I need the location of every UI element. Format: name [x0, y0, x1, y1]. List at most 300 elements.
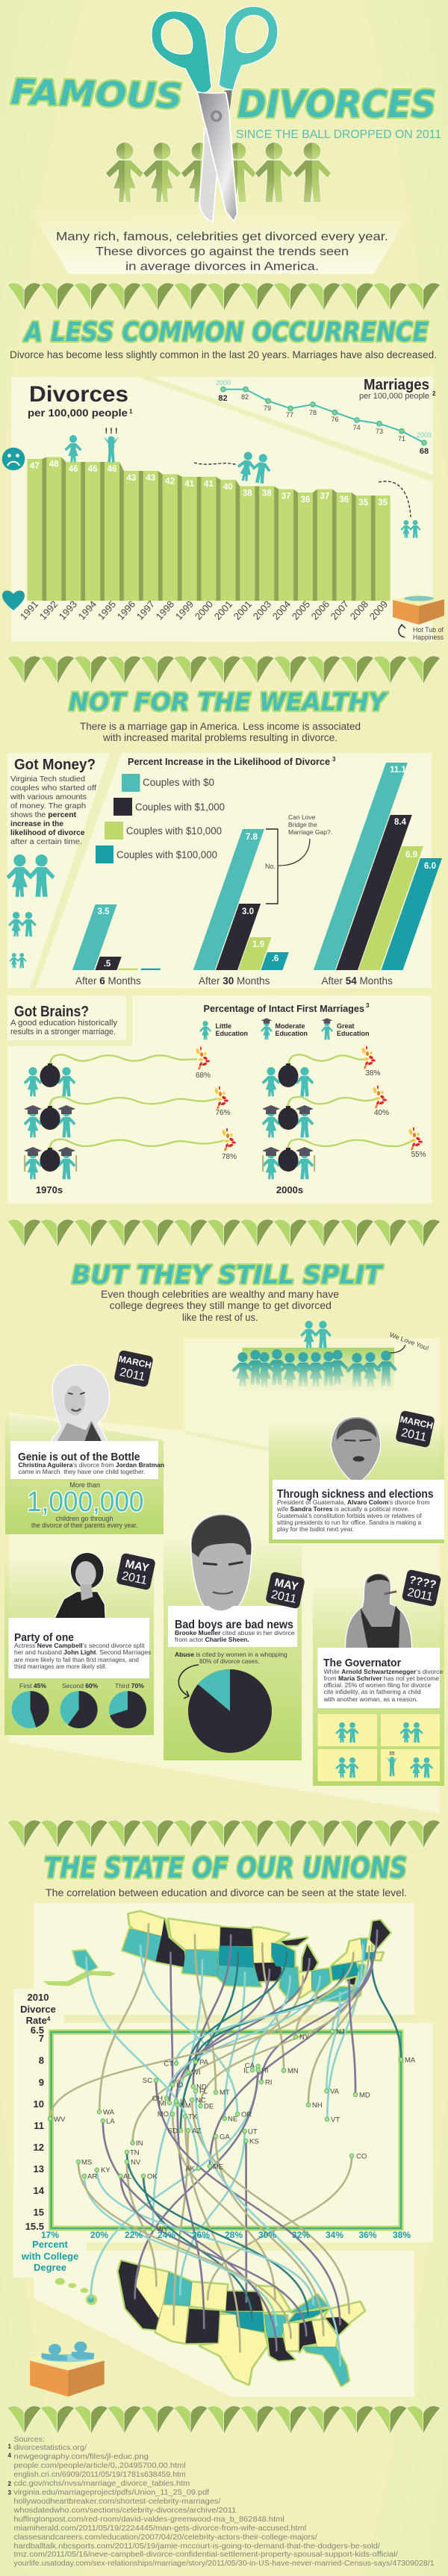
state data points and labels: WV: [54, 2116, 66, 2124]
panel: bad boys are bad news: 80% of divorce cases.: [199, 1657, 260, 1665]
map: southern states: [55, 2261, 364, 2386]
chart heading: intact first marriages: Percentage of Intact First Marriages: [203, 1003, 364, 1014]
crowd: We Love You!: [388, 1331, 430, 1352]
section intro: Divorce has become less slightly common in the last 20 years. Marriages have also decreased.: [10, 349, 437, 360]
slope lines: state connections: [50, 1924, 401, 2366]
legend: [96, 774, 225, 863]
badge: ???? 2011: 2011: [406, 1586, 434, 1604]
x axis: percent with college degree: 30%: [258, 2230, 276, 2240]
bar chart: after 30 months: After 30 Months: [199, 975, 270, 987]
state data points and labels: MI: [158, 2100, 167, 2107]
state data points and labels: NJ: [336, 2028, 345, 2036]
y axis: divorce rate: 6.5: [31, 2025, 44, 2036]
panel: got brains: [7, 995, 432, 1204]
callout: can love bridge the marriage gap: Bridge the: [288, 821, 317, 828]
heart banner 4: [7, 1820, 440, 1848]
section intro: with increased marital problems resulting in divorce.: [102, 731, 337, 743]
state data points and labels: GA: [220, 2133, 230, 2142]
bar chart: after 6 months: .5: [104, 960, 111, 969]
panel: bad boys are bad news: Brooke Mueller cited abuse in her divorce: [175, 1629, 295, 1636]
state data points and labels: LA: [106, 2118, 115, 2125]
fuse chart: 2000s: 55%: [411, 1151, 426, 1159]
bar chart: divorces per year: 46: [69, 465, 78, 474]
panel: bad boys are bad news: [164, 1514, 302, 1760]
bar chart: after 54 months: After 54 Months: [321, 975, 393, 987]
state data points and labels: KS: [249, 2137, 259, 2146]
bar chart: divorces per year: 1998: [154, 598, 176, 622]
bar chart: divorces per year: 36: [301, 495, 310, 504]
icon: scissors: [152, 7, 277, 222]
state data points and labels: VA: [330, 2088, 340, 2095]
fuse chart: 2000s: 38%: [365, 1069, 381, 1078]
caption: hot tub of happiness: Happiness: [413, 634, 444, 642]
bar chart: divorces per year: 38: [262, 490, 272, 498]
state data points and labels: DE: [204, 2103, 214, 2110]
y axis: divorce rate: 2010: [28, 1992, 49, 2003]
state data points and labels: CT: [164, 2060, 173, 2069]
state data points and labels: NC: [196, 2097, 206, 2104]
panel: party of one: [4, 1553, 154, 1735]
legend: education: Moderate: [275, 1022, 305, 1030]
bar chart: divorces per year: 2009: [367, 598, 390, 622]
section intro: There is a marriage gap in America. Less income is associated: [80, 720, 361, 732]
bar chart: divorces per year: 2007: [329, 598, 351, 622]
state data points and labels: WI: [192, 2069, 201, 2077]
badge: may 2011: [116, 1553, 156, 1590]
panel: the governator: from Maria Schriver has not yet become: [324, 1675, 439, 1682]
panel: genie is out of the bottle: Genie is out of the Bottle: [18, 1451, 140, 1463]
x axis: percent with college degree: 24%: [158, 2230, 175, 2240]
heading: but they still split: BUT THEY STILL SPLIT: [72, 1260, 384, 1290]
x axis: percent with college degree: 36%: [358, 2230, 377, 2240]
callout: can love bridge the marriage gap: Can Love: [288, 813, 316, 821]
bar chart: divorces per year: 35: [358, 498, 369, 507]
fuse chart: 2000s: [262, 1046, 426, 1195]
state data points and labels: TN: [130, 2149, 140, 2157]
badge: may 2011: MAY: [273, 1576, 299, 1593]
sources: tmz.com/2011/05/16/neve-campbell-divorce-confidential-settlement-property-spousal-support-kids-official/: [13, 2550, 398, 2559]
state data points and labels: UT: [248, 2128, 258, 2136]
bar chart: divorces per year: 42: [165, 478, 175, 487]
icon: walking couple: [194, 451, 273, 484]
bar chart: after 54 months: 11.1: [390, 766, 406, 775]
state data points and labels: CA: [245, 2062, 255, 2070]
heading: divorces: Divorces: [29, 382, 128, 407]
line chart: marriages: 71: [398, 435, 405, 443]
sources: 2: [7, 2480, 12, 2487]
state data points and labels: WY: [157, 2225, 169, 2233]
fuse chart: 1970s: 78%: [222, 1153, 237, 1161]
intro text: in average divorces in America.: [125, 260, 319, 273]
bar chart: divorces per year: 1991: [18, 598, 40, 622]
badge: march 2011: 2011: [119, 1366, 146, 1384]
legend: education: Education: [215, 1030, 248, 1037]
text: got money: [10, 757, 96, 846]
text: got money: shows the percent: [10, 810, 77, 819]
bar chart: after 30 months: .6: [272, 954, 279, 963]
intro text: [56, 231, 388, 273]
state data points and labels: OR: [241, 2110, 252, 2119]
pie chart: abuse: [178, 1665, 272, 1753]
bar chart: divorces per year: 1996: [115, 598, 137, 622]
bar chart: divorces per year: 2004: [270, 598, 293, 622]
x axis: percent with college degree: 32%: [292, 2230, 310, 2240]
panel: through sickness and elections: wife Sandra Torres is actually a political move.: [276, 1505, 409, 1513]
badge: march 2011: 2011: [400, 1426, 428, 1444]
bar chart: divorces per year: 2000: [193, 598, 215, 622]
state data points and labels: KY: [101, 2166, 111, 2175]
bar chart: divorces per year: 36: [339, 495, 349, 504]
chart heading: percent increase: Percent Increase in the Likelihood of Divorce: [128, 757, 330, 767]
y axis: divorce rate: 9: [39, 2077, 44, 2088]
state data points and labels: SD: [168, 2127, 178, 2136]
state data points and labels: AZ: [192, 2127, 201, 2136]
state data points and labels: OK: [147, 2173, 158, 2180]
callout: can love bridge the marriage gap: No.: [265, 863, 276, 870]
caption: hot tub of happiness: [413, 626, 444, 642]
panel: party of one: Third 70%: [115, 1682, 144, 1689]
bar chart: divorces per year: 2008: [348, 598, 370, 622]
state data points and labels: ID: [176, 2081, 184, 2089]
y axis: divorce rate: 11: [34, 2120, 44, 2131]
section intro: Even though celebrities are wealthy and many have: [101, 1288, 339, 1300]
bar chart: divorces per year: 1999: [173, 598, 196, 622]
state data points and labels: IA: [180, 2098, 187, 2106]
panel: genie is out of the bottle: More than: [69, 1481, 100, 1489]
heading: divorces: per 100,000 people: [28, 407, 128, 419]
panel: divorces and marriages: [11, 377, 433, 642]
panel: through sickness and elections: [269, 1417, 444, 1543]
x axis: percent with college degree: 26%: [192, 2230, 210, 2240]
bar chart: after 54 months: 6.9: [405, 851, 417, 860]
panel: party of one: Second 60%: [62, 1682, 99, 1689]
panel: bad boys are bad news: Abuse is cited by women in a whopping: [175, 1651, 287, 1658]
sources: english.cri.cn/6909/2011/05/19/1781s638459.htm: [13, 2470, 186, 2479]
bar chart: divorces per year: [18, 457, 391, 622]
bar chart: divorces per year: 37: [320, 493, 329, 501]
sources: 1: [7, 2443, 12, 2450]
bar chart: divorces per year: 2001: [212, 598, 234, 622]
line chart: marriages: 2: [432, 390, 436, 397]
state data points and labels: TX: [188, 2113, 198, 2121]
text: got money: with various amounts: [10, 793, 87, 801]
icons: couples shrinking: [7, 854, 55, 968]
icons: infidelity grid: !!!: [390, 1751, 394, 1757]
crowd: [231, 1321, 429, 1388]
state data points and labels: IN: [136, 2139, 143, 2148]
chart frame: [51, 2032, 401, 2228]
state data points and labels: CO: [356, 2152, 367, 2161]
state data points and labels: AR: [87, 2173, 97, 2180]
section intro: [80, 720, 361, 743]
section intro: like the rest of us.: [182, 1311, 258, 1323]
line chart: marriages: [216, 377, 436, 456]
panel: genie is out of the bottle: came in March. they have one child together.: [18, 1468, 145, 1475]
sources: 4: [7, 2452, 12, 2459]
x axis: percent with college degree: 38%: [393, 2230, 411, 2240]
badge: march 2011: [395, 1410, 435, 1448]
icons: infidelity grid: [318, 1714, 440, 1781]
heading: not for the wealthy: NOT FOR THE WEALTHY: [69, 687, 388, 716]
intro text: Many rich, famous, celebrities get divorced every year.: [56, 231, 388, 243]
legend: education: [199, 1018, 370, 1040]
panel: through sickness and elections: play for the ballot next year.: [277, 1525, 354, 1533]
text: got money: Got Money?: [14, 757, 96, 773]
line chart: marriages: 79: [264, 404, 271, 412]
state data points and labels: MT: [220, 2089, 230, 2097]
x axis: percent with college degree: Percent: [32, 2239, 69, 2250]
panel: bad boys are bad news: from actor Charlie Sheen.: [175, 1636, 249, 1643]
state data points and labels: RI: [265, 2079, 272, 2086]
title: DIVORCES: [237, 83, 436, 126]
bar chart: divorces per year: 2001: [231, 598, 254, 622]
x axis: percent with college degree: with College: [21, 2251, 78, 2262]
icon: angry person on bar: [104, 427, 119, 462]
sources: yourlife.usatoday.com/sex-relationships/marriage/story/2011/05/30-in-US-have-never-married-Census-says/47309028/1: [13, 2559, 435, 2568]
line chart: marriages: 78: [309, 409, 317, 416]
icon: heart: [2, 590, 25, 610]
text: got money: Virginia Tech studied: [10, 775, 85, 784]
map: northern states: [43, 1912, 390, 2001]
bar chart: after 30 months: 7.8: [246, 833, 258, 842]
panel: genie is out of the bottle: 1,000,000: [27, 1486, 143, 1518]
state data points and labels: PA: [199, 2058, 209, 2067]
panel: genie is out of the bottle: the divorce of their parents every year.: [31, 1522, 137, 1529]
y axis: divorce rate: 12: [34, 2142, 44, 2153]
bar chart: after 54 months: [314, 763, 442, 987]
badge: may 2011: [265, 1572, 305, 1609]
badge: ???? 2011: ????: [408, 1574, 438, 1592]
sources: 3: [7, 2489, 12, 2496]
y axis: divorce rate: 14: [34, 2185, 45, 2196]
bar chart: divorces per year: 48: [49, 460, 59, 469]
badge: march 2011: MARCH: [399, 1414, 434, 1431]
bar chart: divorces per year: 46: [88, 465, 97, 474]
text: got money: couples who started off: [10, 784, 96, 793]
state data points and labels: ME: [213, 2163, 223, 2172]
y axis: divorce rate: Rate: [26, 2015, 47, 2026]
text: got money: of money. The graph: [10, 801, 86, 810]
subtitle: SINCE THE BALL DROPPED ON 2011: [236, 128, 441, 141]
bar chart: divorces per year: 46: [108, 465, 116, 474]
panel: through sickness and elections: Guatemala’s constitution forbids wives or relatives of: [277, 1512, 422, 1519]
badge: ???? 2011: [402, 1569, 441, 1607]
x axis: percent with college degree: 20%: [90, 2230, 108, 2240]
state data points and labels: MD: [359, 2091, 370, 2100]
y axis: divorce rate: 15: [34, 2207, 44, 2218]
x axis: percent with college degree: Degree: [34, 2262, 66, 2273]
icon: sad face: [2, 448, 25, 470]
state data points and labels: FL: [199, 2088, 208, 2095]
legend: Couples with $0: [143, 777, 214, 788]
panel: the governator: official. 25% of women filing for divorce: [324, 1681, 431, 1689]
badge: may 2011: 2011: [120, 1569, 149, 1587]
text: got brains: [10, 1004, 117, 1037]
bar chart: after 6 months: [72, 904, 161, 987]
heart banner 1: [7, 283, 440, 310]
y axis: divorce rate: [20, 1992, 56, 2232]
panel: genie is out of the bottle: children go through: [55, 1515, 113, 1522]
bar chart: divorces per year: 40: [223, 483, 233, 492]
text: got brains: A good education historically: [10, 1019, 117, 1028]
state data points and labels: WA: [103, 2109, 115, 2116]
bar chart: divorces per year: 1997: [134, 598, 157, 622]
badge: may 2011: MAY: [124, 1557, 150, 1575]
icon: couple in hot tub: [27, 2342, 106, 2397]
bar chart: divorces per year: 1993: [57, 598, 79, 622]
x axis: percent with college degree: 28%: [225, 2230, 243, 2240]
y axis: divorce rate: Divorce: [20, 2004, 56, 2015]
bar chart: divorces per year: 2003: [251, 598, 273, 622]
state data points and labels: OH: [152, 2095, 163, 2103]
bar chart: after 6 months: 3.5: [97, 907, 110, 916]
panel: genie is out of the bottle: Christina Aguilera’s divorce from Jordan Bratman: [18, 1461, 164, 1469]
state data points and labels: AK: [185, 2165, 196, 2173]
text: got money: after a certain time.: [10, 837, 82, 846]
y axis: divorce rate: 4: [47, 2016, 51, 2022]
fuse chart: 1970s: [24, 1046, 237, 1195]
title: FAMOUS: [10, 72, 183, 116]
state data points and labels: IL: [243, 2067, 249, 2075]
legend: education: Little: [215, 1022, 231, 1030]
line chart: marriages: 73: [376, 428, 383, 435]
panel: party of one: Party of one: [14, 1631, 74, 1644]
bar chart: divorces per year: 1994: [76, 598, 99, 622]
line chart: marriages: per 100,000 people: [359, 392, 429, 401]
bar chart: divorces per year: 2005: [290, 598, 312, 622]
panels: map backdrop: [13, 1903, 433, 2397]
section intro: college degrees they still mange to get divorced: [110, 1299, 332, 1311]
badge: may 2011: 2011: [270, 1588, 298, 1606]
sources: hardballtalk.nbcsports.com/2011/05/19/jamie-mccourt-is-going-to-demand-that-the-dodgers-be-sold/: [13, 2542, 380, 2551]
panel: party of one: third marriages are more likely still.: [14, 1663, 107, 1670]
y axis: divorce rate: 15.5: [25, 2221, 44, 2232]
state data points and labels: [48, 2028, 416, 2233]
panel: got money: [7, 753, 432, 988]
icon: girl on bar: [65, 435, 81, 462]
bar chart: after 30 months: 3.0: [242, 907, 254, 916]
bar chart: divorces per year: 43: [146, 474, 155, 483]
line chart: marriages: 74: [353, 424, 361, 431]
sources: huffingtonpost.com/red-room/david-valdes-greenwood-ma_b_862848.html: [13, 2515, 284, 2524]
icon: hot tub: [393, 595, 444, 637]
callout: can love bridge the marriage gap: [265, 813, 332, 904]
bar chart: divorces per year: 47: [30, 462, 40, 471]
paper doll chain: [106, 143, 331, 202]
state data points and labels: NM: [180, 2101, 191, 2110]
fuse chart: 1970s: 1970s: [36, 1184, 63, 1195]
state data points and labels: NY: [299, 2033, 310, 2042]
header: lighter trapezoid behind intro: [28, 204, 414, 274]
y axis: divorce rate: 10: [34, 2098, 44, 2110]
line chart: marriages: 76: [331, 416, 339, 423]
bar chart: divorces per year: 37: [281, 493, 290, 501]
panel: the governator: While Arnold Schwartzenegger’s divorce: [324, 1668, 443, 1675]
sources: people.com/people/article/0,,20495700,00.html: [13, 2461, 186, 2470]
bar chart: divorces per year: 2006: [309, 598, 332, 622]
fuse chart: 2000s: 40%: [374, 1109, 389, 1117]
chart heading: percent increase: 3: [332, 756, 336, 763]
section intro: [101, 1288, 339, 1323]
bar chart: after 6 months: After 6 Months: [75, 975, 141, 987]
panel: the governator: with another woman, as a reason.: [323, 1695, 418, 1703]
text: got brains: results in a stronger marriage.: [10, 1028, 116, 1037]
state data points and labels: NH: [312, 2101, 323, 2110]
bar chart: after 30 months: 1.9: [252, 940, 264, 949]
text: got money: increase in the: [10, 819, 63, 828]
legend: Couples with $100,000: [116, 849, 217, 860]
state data points and labels: SC: [143, 2077, 152, 2085]
heart banner 3: [7, 1219, 440, 1247]
x axis: percent with college degree: [21, 2230, 411, 2273]
bar chart: after 30 months: [193, 829, 289, 987]
section intro: The correlation between education and divorce can be seen at the state level.: [46, 1886, 407, 1898]
panel: party of one: are more likely to fail than first marriages, and: [14, 1656, 139, 1663]
state data points and labels: MS: [81, 2158, 92, 2167]
sources: Sources:: [13, 2435, 45, 2444]
callout: can love bridge the marriage gap: Marriage Gap?.: [288, 828, 332, 836]
fuse chart: 1970s: 68%: [196, 1072, 211, 1080]
panel: celebrities backdrop: [9, 1338, 440, 1813]
bar chart: divorces per year: 35: [378, 498, 388, 507]
state data points and labels: NE: [228, 2115, 237, 2124]
line chart: marriages: 2009: [417, 431, 432, 439]
intro text: These divorces go against the trends seen: [96, 246, 349, 258]
x axis: percent with college degree: 17%: [41, 2230, 59, 2240]
panel: genie is out of the bottle: [5, 1366, 164, 1534]
bar chart: divorces per year: 1995: [96, 598, 118, 622]
bar chart: divorces per year: 41: [204, 480, 214, 489]
icon: small couple with jump path: [379, 481, 421, 538]
sources: cdc.gov/nchs/nvss/marriage_divorce_tables.htm: [13, 2479, 190, 2488]
caption: hot tub of happiness: Hot Tub of: [413, 626, 444, 634]
pie charts: failure rates: [12, 1691, 146, 1728]
line chart: marriages: 68: [420, 447, 429, 456]
state data points and labels: MO: [158, 2110, 169, 2119]
sources: [7, 2435, 435, 2568]
fuse chart: 2000s: 2000s: [276, 1184, 303, 1195]
heading: divorces: 1: [129, 408, 133, 415]
x axis: percent with college degree: 22%: [125, 2230, 143, 2240]
legend: Couples with $10,000: [126, 825, 222, 837]
panel: through sickness and elections: President of Guatemala, Alvaro Colom’s divorce from: [277, 1498, 429, 1506]
bar chart: divorces per year: 41: [184, 480, 195, 489]
sources: divorcestatistics.org/: [13, 2443, 87, 2452]
icon: angry person on bar: !!!: [105, 427, 118, 436]
legend: education: Education: [275, 1030, 308, 1037]
y axis: divorce rate: 7: [39, 2033, 44, 2044]
y axis: divorce rate: 8: [39, 2055, 44, 2066]
text: got money: likelihood of divorce: [10, 828, 85, 837]
sources: newgeography.com/files/jl-educ.png: [13, 2452, 149, 2461]
line chart: marriages: 77: [286, 411, 293, 419]
state data points and labels: MN: [287, 2067, 299, 2075]
panel: party of one: First 45%: [19, 1682, 46, 1689]
sources: hollywoodheartbreaker.com/shortest-celebrity-marriages/: [13, 2497, 220, 2506]
panel: the governator: cite infidelity, as in fathering a child: [324, 1688, 421, 1695]
panel: party of one: Actress Neve Campbell’s second divorce split: [14, 1642, 145, 1649]
badge: march 2011: MARCH: [118, 1354, 152, 1371]
line chart: marriages: 82: [218, 394, 228, 403]
x axis: percent with college degree: 34%: [326, 2230, 343, 2240]
state data points and labels: NV: [131, 2158, 141, 2167]
y axis: divorce rate: 13: [34, 2163, 44, 2175]
legend: education: Education: [337, 1030, 370, 1037]
panel: through sickness and elections: sitting presidents to run for office. Sandra is making a: [277, 1519, 421, 1526]
panel: through sickness and elections: Through sickness and elections: [277, 1488, 433, 1501]
title: [10, 72, 436, 126]
bar chart: divorces per year: 1992: [37, 598, 60, 622]
